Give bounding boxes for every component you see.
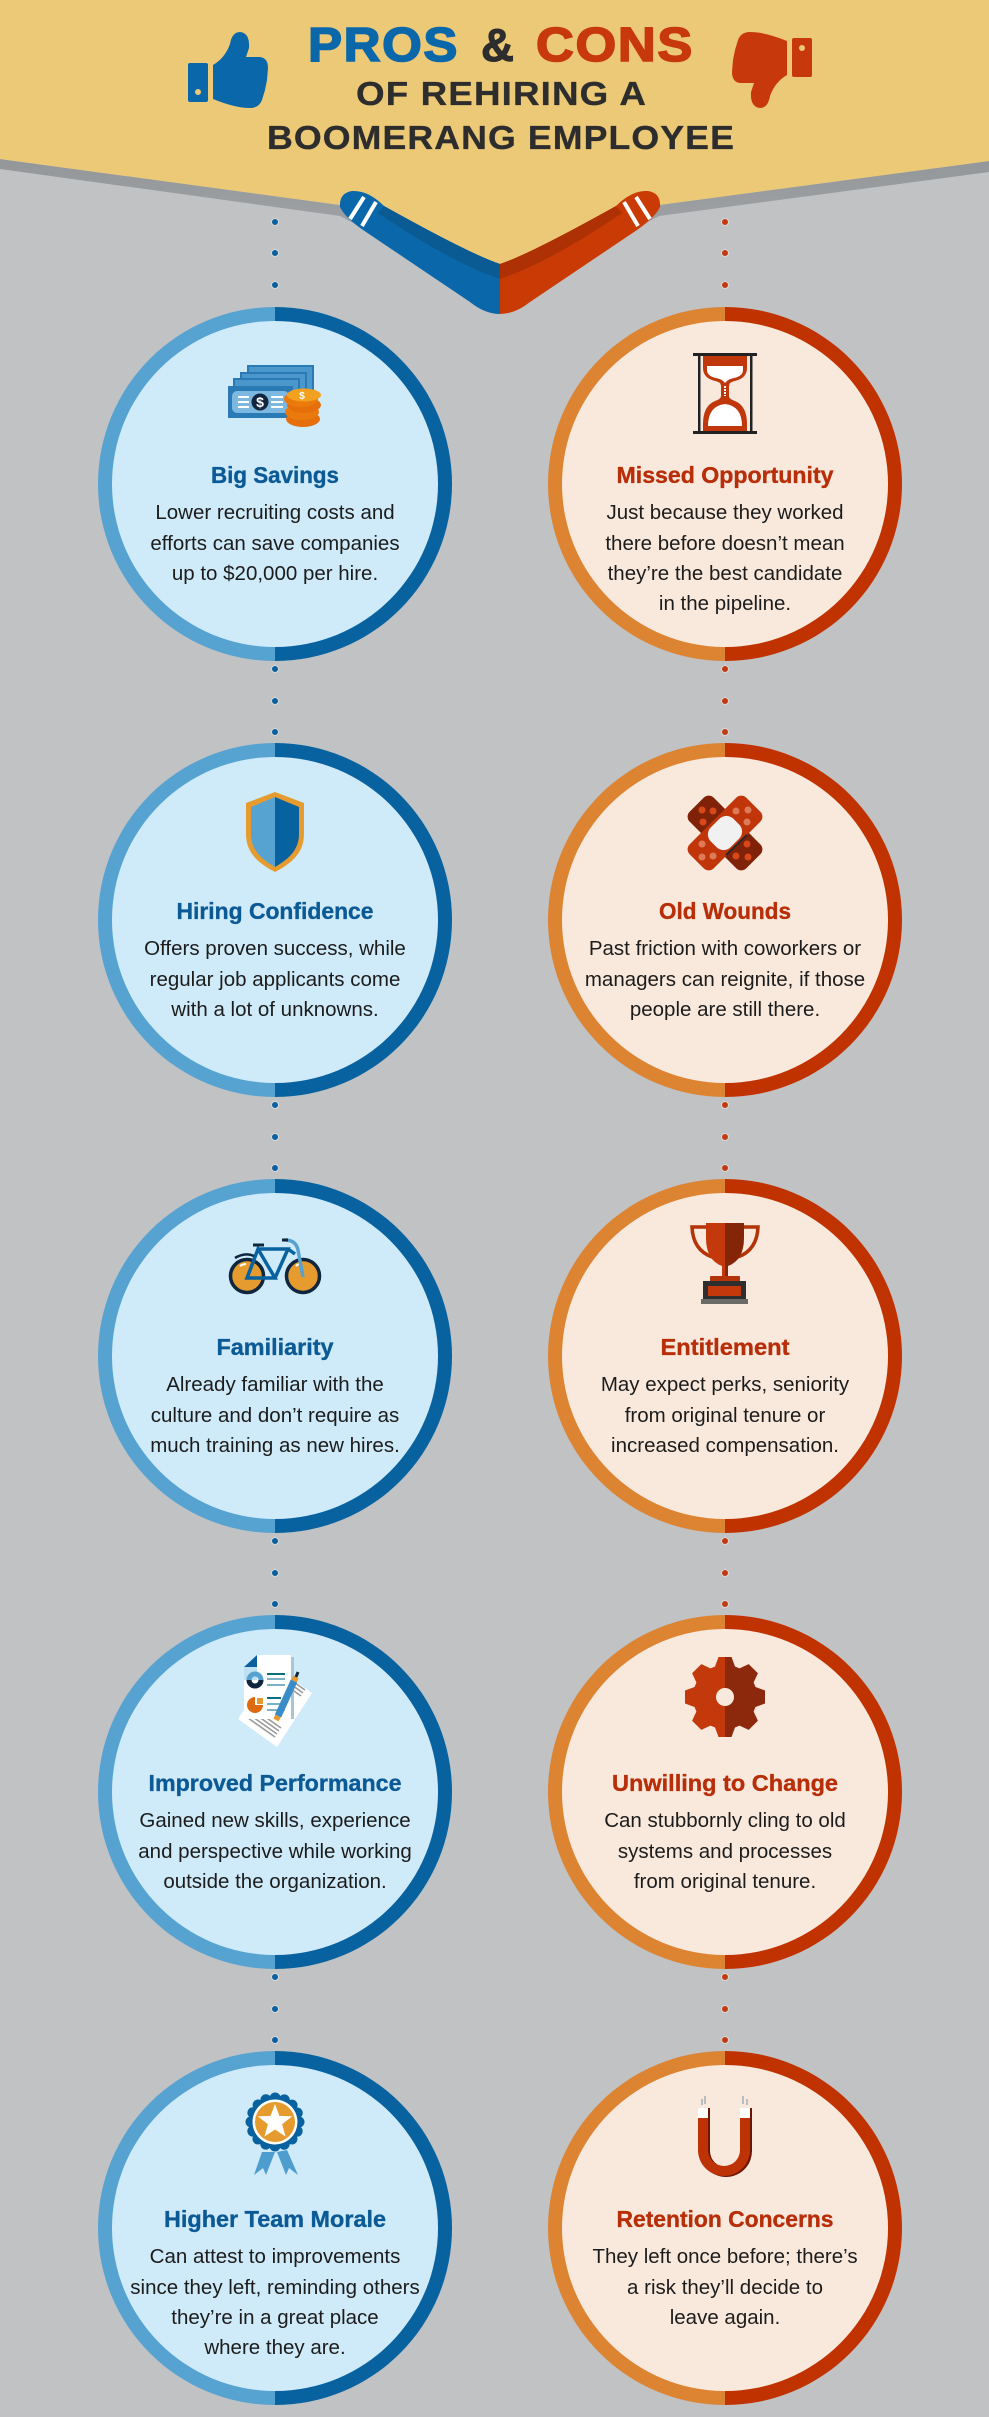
icon: hourglass <box>693 353 757 434</box>
icon: boomerang <box>340 191 660 314</box>
heading: Big Savings <box>211 462 339 488</box>
panel: Unwilling to Change <box>548 1615 902 1969</box>
text block: and perspective while working <box>138 1840 412 1863</box>
text block: They left once before; there’s <box>592 2245 858 2268</box>
text block: increased compensation. <box>611 1434 839 1457</box>
text block: from original tenure or <box>625 1404 825 1427</box>
text block: they’re in a great place <box>171 2306 379 2329</box>
panel: Old Wounds <box>548 743 902 1097</box>
text block: Offers proven success, while <box>144 937 406 960</box>
connector dots: pros column <box>272 218 278 2044</box>
heading: Missed Opportunity <box>617 462 834 488</box>
icon: gear <box>685 1657 765 1737</box>
text block <box>150 501 400 585</box>
icon: trophy <box>692 1223 758 1304</box>
text block: Past friction with coworkers or <box>589 937 861 960</box>
text block <box>144 937 406 1021</box>
text block: culture and don’t require as <box>151 1404 399 1427</box>
text block: managers can reignite, if those <box>585 968 865 991</box>
text block: efforts can save companies <box>150 532 400 555</box>
title <box>267 19 735 156</box>
heading: Old Wounds <box>659 898 791 924</box>
text block: much training as new hires. <box>150 1434 400 1457</box>
text block: May expect perks, seniority <box>601 1373 850 1396</box>
text block <box>138 1809 412 1893</box>
heading: Improved Performance <box>148 1770 402 1796</box>
text block: Already familiar with the <box>166 1373 384 1396</box>
text block: there before doesn’t mean <box>605 532 845 555</box>
text block: Lower recruiting costs and <box>155 501 395 524</box>
panel: Familiarity <box>98 1179 452 1533</box>
heading: Retention Concerns <box>616 2206 834 2232</box>
text block <box>592 2245 858 2329</box>
icon: documents and pencil <box>238 1655 312 1747</box>
text block <box>601 1373 850 1457</box>
text block: where they are. <box>203 2336 346 2359</box>
panel: Missed Opportunity <box>548 307 902 661</box>
text block: Can stubbornly cling to old <box>604 1809 846 1832</box>
panel: Entitlement <box>548 1179 902 1533</box>
text block: people are still there. <box>630 998 820 1021</box>
panel: Higher Team Morale <box>98 2051 452 2405</box>
icon: magnet <box>698 2096 752 2177</box>
text block: they’re the best candidate <box>608 562 842 585</box>
panel: Hiring Confidence <box>98 743 452 1097</box>
title: & <box>481 19 514 71</box>
header banner <box>0 0 989 300</box>
text block: outside the organization. <box>163 1870 387 1893</box>
icon: award rosette <box>251 2098 299 2175</box>
panel: Big Savings <box>98 307 452 661</box>
icon: thumbs up <box>188 32 268 108</box>
icon: money and coins: $ <box>299 391 305 402</box>
heading: Hiring Confidence <box>176 898 374 924</box>
title: OF REHIRING A <box>356 75 647 112</box>
text block: a risk they’ll decide to <box>627 2276 823 2299</box>
text block: in the pipeline. <box>659 592 791 615</box>
icon: shield <box>246 792 304 872</box>
title: PROS <box>308 19 459 72</box>
text block <box>150 1373 400 1457</box>
heading: Familiarity <box>216 1334 334 1360</box>
icon: crossed bandages <box>685 793 765 873</box>
text block: Gained new skills, experience <box>139 1809 411 1832</box>
icon: money and coins: $ <box>256 394 264 410</box>
icon: money and coins <box>228 366 321 427</box>
text block <box>604 1809 846 1893</box>
text block <box>605 501 845 615</box>
text block <box>130 2245 420 2359</box>
panel: Improved Performance <box>98 1615 452 1969</box>
icon: bicycle <box>230 1240 320 1292</box>
panel: Retention Concerns <box>548 2051 902 2405</box>
title: CONS <box>536 19 694 72</box>
text block: regular job applicants come <box>150 968 400 991</box>
text block: Can attest to improvements <box>150 2245 400 2268</box>
connector dots: cons column <box>722 218 728 2044</box>
heading: Entitlement <box>660 1334 790 1360</box>
icon: thumbs down <box>732 32 812 108</box>
text block: systems and processes <box>618 1840 832 1863</box>
text block: Just because they worked <box>606 501 844 524</box>
heading: Higher Team Morale <box>164 2206 386 2232</box>
text block <box>585 937 865 1021</box>
text block: from original tenure. <box>634 1870 816 1893</box>
text block: up to $20,000 per hire. <box>172 562 378 585</box>
text block: leave again. <box>670 2306 780 2329</box>
heading: Unwilling to Change <box>612 1770 838 1796</box>
text block: with a lot of unknowns. <box>170 998 379 1021</box>
text block: since they left, reminding others <box>130 2276 420 2299</box>
title: BOOMERANG EMPLOYEE <box>267 119 735 156</box>
